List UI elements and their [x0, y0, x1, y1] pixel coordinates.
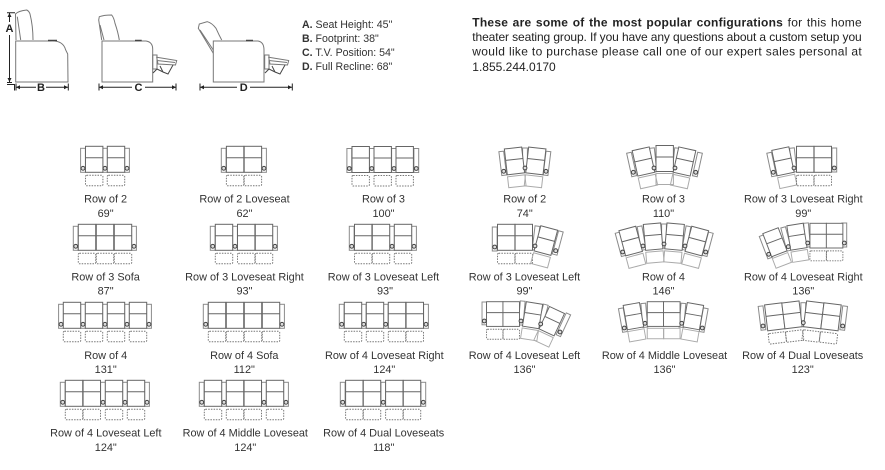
arrow: dimension A: A — [6, 23, 14, 35]
dimensions list — [302, 19, 395, 73]
config: straight row of 2, 69 in — [81, 146, 129, 220]
config: straight row of 4 loveseat right, 124 in — [325, 302, 444, 376]
config: straight row of 3 loveseat right, 93 in: 93" — [237, 285, 253, 297]
config: curved row of 4 loveseat left, 136 in: Row of 4 Loveseat Left — [469, 350, 580, 362]
config: straight row of 3 sofa, 87 in — [71, 224, 141, 297]
config: straight row of 3 loveseat left, 93 in: 93" — [377, 285, 393, 297]
intro paragraph: theater seating group. If you have any questions about a custom setup you — [472, 30, 862, 44]
dimensions list: B. Footprint: 38" — [302, 33, 379, 45]
config: straight row of 2, 69 in: 69" — [98, 208, 114, 220]
config: straight row of 4 loveseat right, 124 in: 124" — [373, 364, 395, 376]
dimensions list: A. Seat Height: 45" — [302, 19, 393, 31]
config: straight row of 4 sofa, 112 in: 112" — [234, 364, 255, 376]
config: straight row of 3 sofa, 87 in: 87" — [98, 285, 114, 297]
config: curved row of 4, 146 in: Row of 4 — [642, 272, 685, 284]
icon: upright chair side view — [16, 10, 68, 82]
config: curved row of 3 loveseat right, 99 in: 99" — [795, 208, 811, 220]
config: straight row of 4 sofa, 112 in — [203, 302, 284, 376]
config: straight row of 4 middle loveseat, 124 in: 124" — [234, 442, 256, 454]
config: curved row of 3, 110 in — [627, 146, 702, 220]
config: straight row of 2 loveseat, 62 in: Row of 2 Loveseat — [199, 194, 290, 206]
icon: chair with raised footrest — [99, 15, 177, 82]
config: straight row of 4 dual loveseats, 118 in: 118" — [373, 442, 394, 454]
config: straight row of 4 dual loveseats, 118 in: Row of 4 Dual Loveseats — [323, 428, 445, 440]
arrow: dimension D: D — [240, 82, 248, 94]
config: straight row of 4 middle loveseat, 124 in — [183, 380, 308, 454]
diagram: seat height and footprint — [6, 10, 68, 94]
config: straight row of 2 loveseat, 62 in — [199, 146, 290, 220]
config: straight row of 3, 100 in: 100" — [372, 208, 395, 220]
config: curved row of 3 loveseat left, 99 in: 99" — [517, 285, 533, 297]
config: straight row of 3, 100 in: Row of 3 — [362, 194, 405, 206]
config: straight row of 4 loveseat right, 124 in: Row of 4 Loveseat Right — [325, 350, 444, 362]
config: straight row of 2 loveseat, 62 in: 62" — [237, 208, 253, 220]
intro paragraph: These are some of the most popular configurations for this home — [472, 16, 862, 30]
config: curved row of 3 loveseat right, 99 in: Row of 3 Loveseat Right — [744, 194, 863, 206]
config: curved row of 4 dual loveseats, 123 in: Row of 4 Dual Loveseats — [742, 350, 864, 362]
config: curved row of 4 dual loveseats, 123 in — [742, 301, 864, 376]
config: curved row of 2, 74 in: Row of 2 — [503, 194, 546, 206]
config: curved row of 4, 146 in — [615, 223, 713, 297]
config: curved row of 3 loveseat left, 99 in — [469, 224, 580, 297]
config: curved row of 2, 74 in — [499, 147, 551, 220]
config: straight row of 3 sofa, 87 in: Row of 3 Sofa — [71, 272, 141, 284]
intro paragraph: 1.855.244.0170 — [472, 60, 556, 74]
config: straight row of 3 loveseat left, 93 in: Row of 3 Loveseat Left — [328, 272, 439, 284]
config: curved row of 4 loveseat right, 136 in: Row of 4 Loveseat Right — [744, 272, 863, 284]
config: straight row of 4 loveseat left, 124 in — [50, 380, 162, 454]
dimensions list: D. Full Recline: 68" — [302, 61, 393, 73]
config: curved row of 4, 146 in: 146" — [652, 285, 675, 297]
config: straight row of 4, 131 in: 131" — [95, 364, 117, 376]
config: curved row of 3 loveseat left, 99 in: Row of 3 Loveseat Left — [469, 272, 580, 284]
config: curved row of 2, 74 in: 74" — [517, 208, 533, 220]
config: curved row of 3, 110 in: Row of 3 — [642, 194, 685, 206]
config: curved row of 4 loveseat left, 136 in — [469, 301, 580, 376]
config: straight row of 4 loveseat left, 124 in: 124" — [95, 442, 117, 454]
config: straight row of 3 loveseat right, 93 in: Row of 3 Loveseat Right — [185, 272, 304, 284]
config: curved row of 4 loveseat left, 136 in: 136" — [513, 364, 536, 376]
config: straight row of 4 loveseat left, 124 in: Row of 4 Loveseat Left — [50, 428, 162, 440]
config: straight row of 2, 69 in: Row of 2 — [84, 194, 127, 206]
config: straight row of 3 loveseat left, 93 in — [328, 224, 439, 297]
config: straight row of 4 dual loveseats, 118 in — [323, 380, 445, 454]
icon: fully reclined chair — [198, 22, 289, 82]
config: straight row of 3 loveseat right, 93 in — [185, 224, 304, 297]
intro paragraph: would like to purchase please call one of our expert sales personal at — [471, 45, 862, 59]
config: straight row of 4, 131 in: Row of 4 — [84, 350, 127, 362]
config: curved row of 4 loveseat right, 136 in: 136" — [792, 285, 814, 297]
config: curved row of 4 middle loveseat, 136 in: 136" — [653, 364, 676, 376]
arrow: dimension C: C — [135, 82, 143, 94]
arrow: dimension B: B — [37, 82, 45, 94]
config: curved row of 3 loveseat right, 99 in — [744, 146, 863, 220]
config: curved row of 4 loveseat right, 136 in — [744, 223, 863, 297]
config: curved row of 3, 110 in: 110" — [653, 208, 674, 220]
config: straight row of 4 sofa, 112 in: Row of 4 Sofa — [210, 350, 279, 362]
config: curved row of 4 middle loveseat, 136 in — [602, 302, 727, 376]
diagram: full recline — [198, 22, 292, 94]
dimensions list: C. T.V. Position: 54" — [302, 47, 395, 59]
config: straight row of 4, 131 in — [59, 302, 151, 376]
config: straight row of 4 middle loveseat, 124 in: Row of 4 Middle Loveseat — [183, 428, 308, 440]
config: curved row of 4 middle loveseat, 136 in: Row of 4 Middle Loveseat — [602, 350, 727, 362]
config: straight row of 3, 100 in — [347, 146, 419, 220]
diagram: T.V. position — [99, 15, 177, 94]
intro paragraph — [471, 16, 862, 74]
config: curved row of 4 dual loveseats, 123 in: 123" — [792, 364, 814, 376]
